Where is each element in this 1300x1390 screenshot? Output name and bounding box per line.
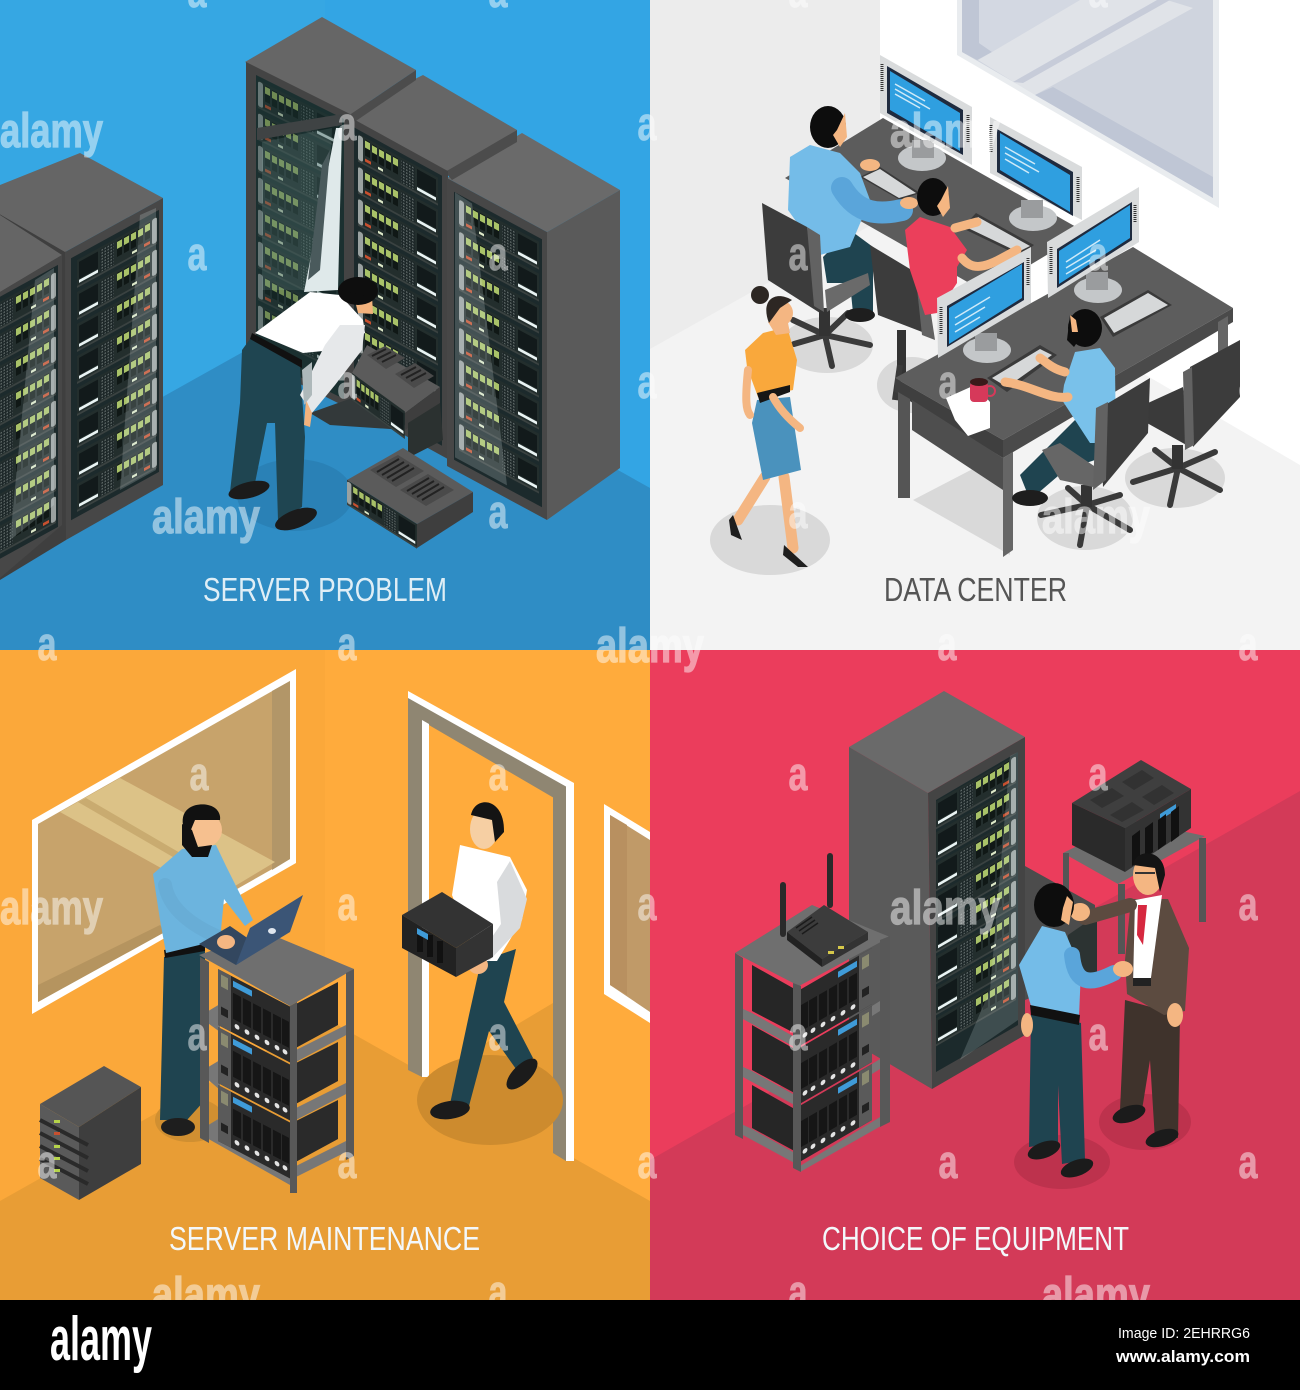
stock photo watermarks: a [938,1135,958,1188]
rack two [346,115,448,459]
man with beard [1005,309,1116,506]
stock photo watermarks: alamy [890,105,1000,158]
image id: Image ID: 2EHRRG6 [1118,1325,1250,1342]
shadow under walking man [417,1055,563,1145]
panel: server problem [0,0,650,650]
front desk [895,247,1233,557]
table with server [1063,760,1206,954]
man in red shirt [905,178,1017,315]
rack one, door open [246,62,350,409]
pulled out server unit [310,345,443,458]
stock photo watermarks: a [1088,747,1108,800]
tall server rack [849,691,1025,1089]
stock photo watermarks: a [188,227,207,280]
stock photo watermarks: alamy [152,1269,260,1322]
stock photo watermarks: alamy [0,882,103,935]
man in blue shirt from behind [1019,883,1133,1181]
footer logo: alamy [50,1305,152,1374]
shadow under technician [237,459,353,531]
stock photo watermarks: a [488,1265,508,1318]
stock photo watermarks: a [788,227,808,280]
stock photo watermarks: alamy [890,882,1000,935]
stock photo watermarks: alamy [1042,491,1150,544]
monitor back left [880,55,972,171]
left server racks [0,153,163,580]
monitor front left [937,247,1031,363]
man in brown suit [1070,853,1189,1151]
stock photo watermarks: a [938,355,958,408]
stock photo watermarks: a [488,747,508,800]
stock photo watermarks: a [338,97,357,150]
stock photo watermarks: a [488,227,508,280]
stock photo watermarks: a [638,97,657,150]
title: choice of equipment: CHOICE OF EQUIPMENT [822,1220,1129,1257]
technician bending over [227,277,378,535]
stock photo watermarks: a [788,747,808,800]
metal server shelf [199,932,354,1193]
stock photo watermarks: a [788,1007,808,1060]
metal shelf with units [735,905,890,1172]
small server tower [40,1066,141,1200]
keyboard front left [987,345,1057,392]
keyboard center [962,213,1034,256]
title: server problem: SERVER PROBLEM [203,571,447,608]
stock photo watermarks: a [338,617,357,670]
panel: server maintenance [0,650,650,1300]
right server rack group with open door [245,17,620,520]
man in blue shirt [788,106,918,322]
back desk [785,118,1085,292]
stock photo watermarks: a [1088,1007,1108,1060]
stock photo watermarks: alamy [152,491,260,544]
stock photo watermarks: a [638,877,657,930]
stock photo watermarks: a [1238,355,1258,408]
stock photo watermarks: a [190,747,209,800]
stock photo watermarks: a [1088,227,1108,280]
stock photo watermarks: a [38,1135,57,1188]
shadows under people [1014,1135,1110,1189]
chair left [793,308,870,366]
stock photo watermarks: a [338,877,357,930]
window [957,0,1219,208]
stock photo watermarks: a [638,1135,657,1188]
panel: choice of equipment [650,650,1300,1300]
footer bar [0,1300,1300,1390]
stock photo watermarks: a [938,617,957,670]
stock photo watermarks: a [788,1265,808,1318]
stock photo watermarks: a [338,355,357,408]
stock photo watermarks: a [1238,97,1258,150]
shadow under bearded man [155,1098,225,1142]
stock photo watermarks: a [788,485,808,538]
left window [32,669,296,1014]
loose server on floor [347,448,473,549]
chair middle [870,245,935,400]
stock photo watermarks: a [1238,617,1258,670]
title: server maintenance: SERVER MAINTENANCE [169,1220,480,1257]
rack three [447,178,547,520]
chair front [1041,378,1150,545]
small tower behind people [1025,866,1097,1000]
woman walking [729,286,808,567]
bearded man with laptop [153,804,253,1136]
stock photo watermarks: alamy [1042,1269,1150,1322]
monitor back right [990,117,1082,231]
chair behind blue man [762,203,870,313]
stock photo watermarks: a [338,1135,357,1188]
chair far right [1133,340,1240,505]
man carrying server [402,802,543,1122]
floor shadows [710,317,1225,575]
stock photo watermarks: a [188,1007,207,1060]
right window [604,804,650,1023]
router with antennas [780,853,868,967]
panel: data center [650,0,1300,650]
website: www.alamy.com [1115,1347,1250,1366]
stock photo watermarks: alamy [0,105,103,158]
red cup and paper [946,378,995,436]
stock photo watermarks: a [1238,1135,1258,1188]
laptop [199,895,303,965]
keyboard back left [860,167,920,200]
stock photo watermarks: a [638,355,657,408]
stock photo watermarks: a [488,485,508,538]
stock photo watermarks: alamy [596,620,704,673]
stock photo watermarks: a [1238,877,1258,930]
keyboard front right [1100,290,1172,337]
title: data center: DATA CENTER [884,571,1067,608]
stock photo watermarks: a [488,1007,508,1060]
stock photo watermarks: a [38,617,57,670]
door frame [408,691,574,1161]
monitor front right [1047,187,1139,303]
